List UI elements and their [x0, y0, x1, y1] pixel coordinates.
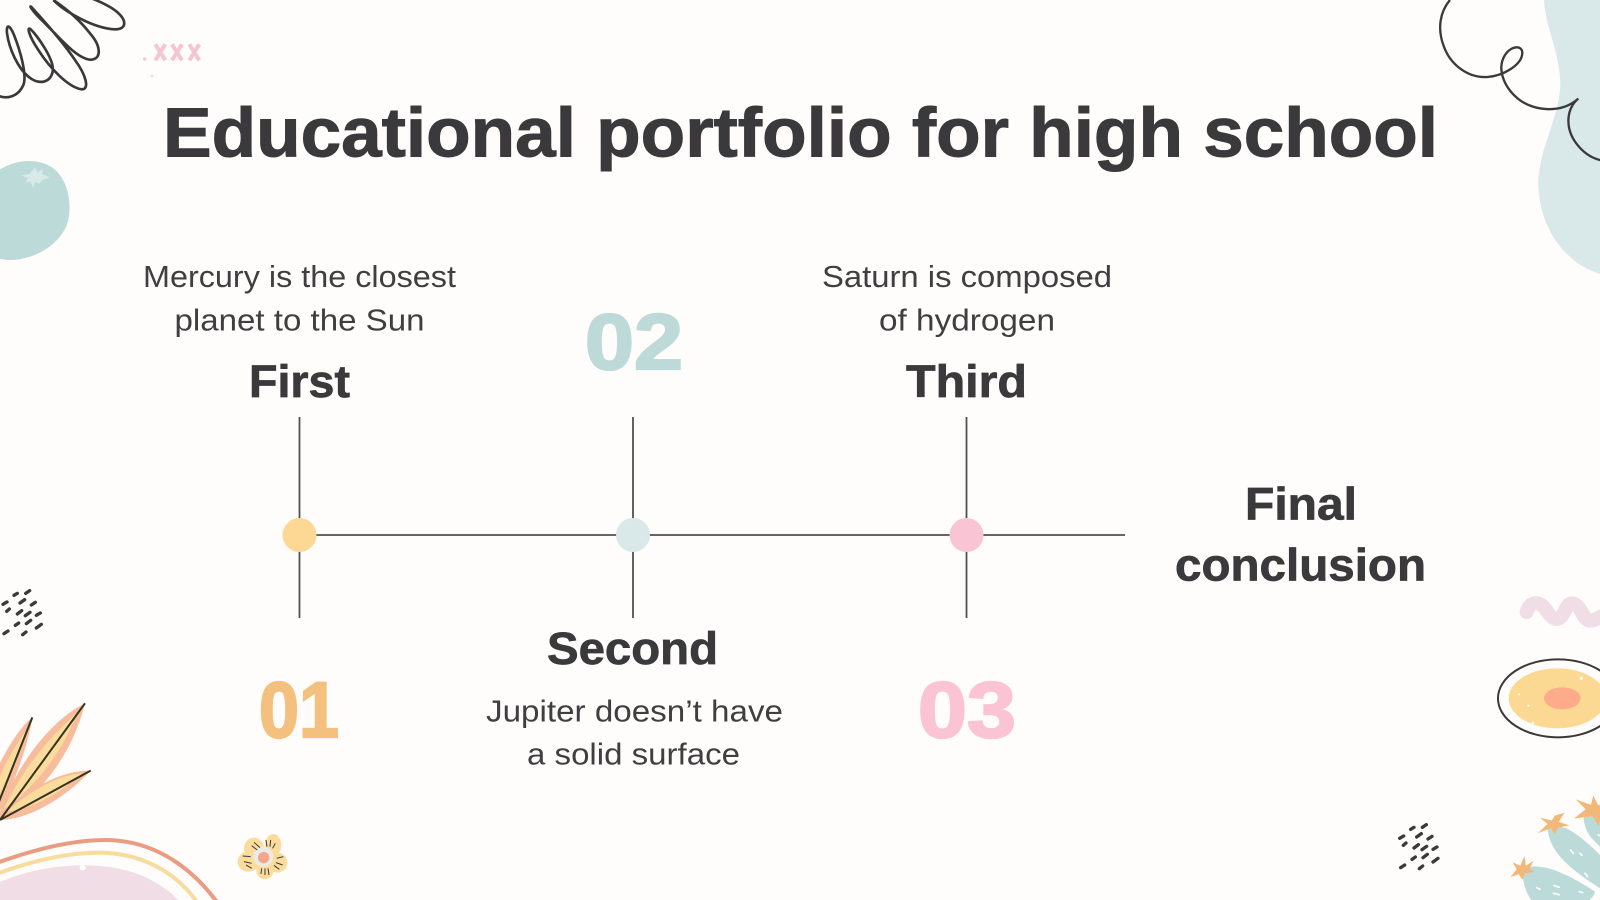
- decoration: teal blob top right: [1538, 0, 1600, 274]
- third milestone description: of hydrogen: [879, 302, 1055, 338]
- timeline: [299, 417, 1125, 618]
- decoration: teal blob left: [0, 161, 70, 260]
- title: Educational portfolio for high school: [163, 94, 1438, 172]
- second milestone description: a solid surface: [527, 736, 740, 772]
- first milestone description: [143, 259, 456, 338]
- decoration: rainbow arcs bottom left: [0, 840, 217, 900]
- final conclusion: conclusion: [1175, 540, 1426, 590]
- decoration: dashes right: [1400, 825, 1438, 869]
- heading: First: First: [249, 356, 350, 407]
- decoration: scribble top left: [0, 0, 124, 97]
- decoration: dashes left: [3, 591, 41, 635]
- third milestone description: [822, 259, 1112, 338]
- heading: Second: Second: [547, 623, 718, 674]
- second milestone description: [486, 694, 783, 772]
- first milestone description: Mercury is the closest: [143, 259, 456, 294]
- number 01: 01: [259, 665, 339, 754]
- decoration: curly line top right: [1440, 0, 1600, 161]
- milestone dot: first: [282, 518, 316, 552]
- final conclusion: Final: [1245, 478, 1357, 530]
- decoration: leaves bottom left: [0, 703, 91, 820]
- decoration: egg shape right: [1498, 659, 1600, 737]
- final conclusion: [1175, 478, 1426, 590]
- decoration: pink squiggle right: [1527, 603, 1600, 621]
- number 03: 03: [918, 665, 1016, 754]
- milestone dot: second: [616, 518, 650, 552]
- decoration: cactus bottom right: [1510, 796, 1600, 900]
- second milestone description: Jupiter doesn’t have: [486, 694, 783, 728]
- number 02: 02: [585, 297, 683, 386]
- decoration: pink crosses: [143, 44, 199, 77]
- heading: Third: Third: [906, 356, 1027, 407]
- first milestone description: planet to the Sun: [174, 302, 424, 338]
- milestone dot: third: [950, 518, 984, 552]
- third milestone description: Saturn is composed: [822, 259, 1112, 294]
- decoration: flower: [238, 834, 287, 879]
